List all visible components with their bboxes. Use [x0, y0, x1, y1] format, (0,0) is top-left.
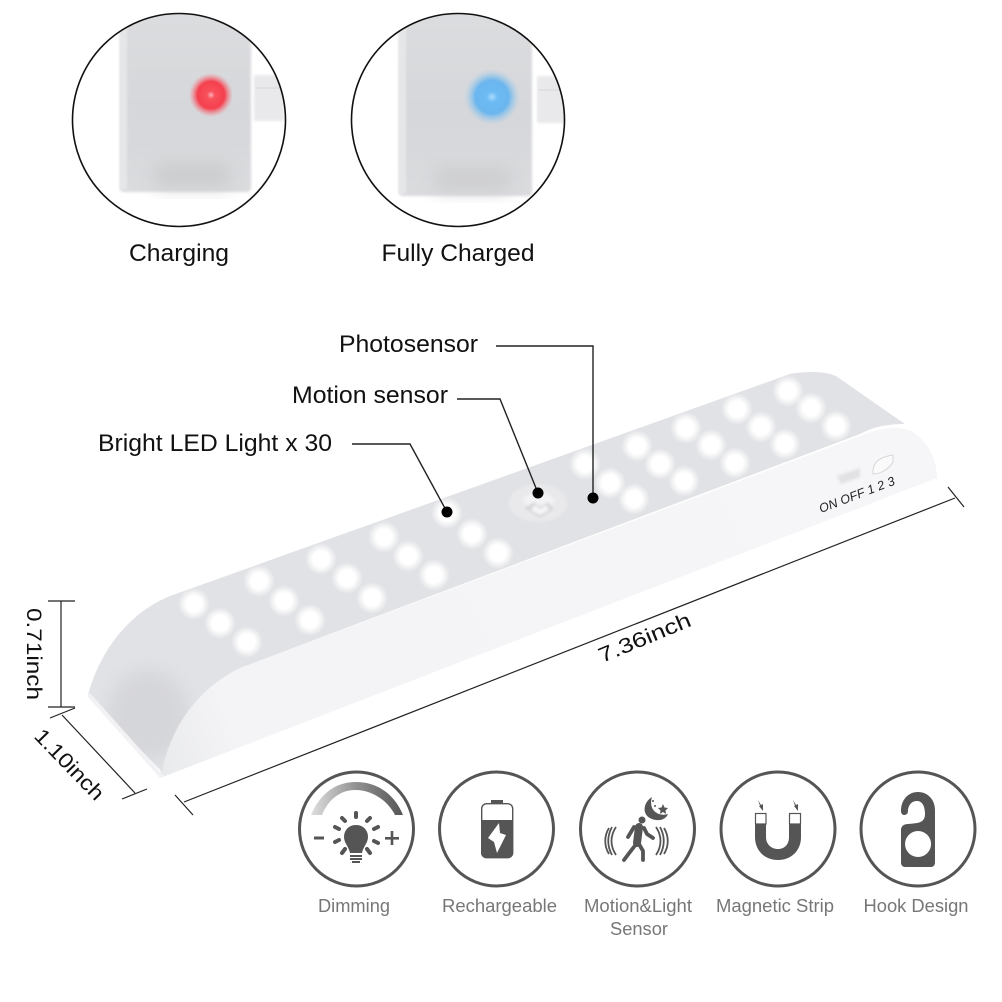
feature: Rechargeable: [440, 772, 557, 916]
icon: light bulb: [314, 813, 399, 863]
dimension: height 0.71inch: [22, 601, 75, 707]
switch labels: ON OFF 1 2 3: [817, 474, 897, 516]
icon: horseshoe magnet: [755, 800, 801, 860]
circle outline: [72, 14, 286, 226]
callout: Photosensor: [339, 331, 598, 504]
label: Rechargeable: Rechargeable: [442, 896, 557, 916]
label: Fully Charged: Fully Charged: [382, 240, 534, 267]
mode button: [873, 455, 893, 474]
icon: sensor waves: [605, 827, 668, 855]
label: Charging: Charging: [129, 240, 229, 267]
feature: Motion & Light Sensor: [580, 772, 694, 939]
end shading: [112, 676, 183, 754]
feature: Motion & Light Sensor: Sensor: [610, 919, 668, 939]
panel: charging indicator: [72, 0, 286, 267]
callout: Bright LED Light x 30: [98, 430, 452, 518]
label: Magnetic Strip: Magnetic Strip: [716, 896, 834, 916]
device close-up: charging: [120, 0, 284, 192]
circle outline: [352, 14, 564, 226]
icon: battery: [481, 800, 513, 858]
dimension: length 7.36inch: 7.36inch: [595, 609, 694, 668]
label: Dimming: Dimming: [318, 896, 390, 916]
callout: Motion sensor: [292, 382, 544, 498]
motion sensor lens: [509, 484, 567, 522]
top surface: [88, 372, 905, 772]
LED array: [178, 375, 852, 658]
panel: fully charged indicator: [352, 0, 569, 267]
icon: moon and star: [645, 797, 668, 820]
feature: Dimming: [300, 772, 414, 916]
icon: blue LED: [464, 69, 520, 125]
label: Hook Design: Hook Design: [864, 896, 968, 916]
label: Motion&Light Sensor: Motion&Light: [584, 896, 692, 916]
icon: door hook hanger: [901, 792, 935, 867]
front face: [160, 428, 937, 778]
dimension: length 7.36inch: [175, 487, 964, 815]
icon: walking person: [624, 816, 653, 860]
device close-up: fully charged: [399, 0, 569, 196]
dimension: height 0.71inch: 0.71inch: [22, 608, 45, 700]
dimension: width 1.10inch: 1.10inch: [29, 724, 108, 805]
base plate: [87, 693, 164, 778]
feature: Magnetic Strip: [716, 772, 835, 916]
switch slider: [837, 468, 860, 484]
feature: Hook Design: [861, 772, 975, 916]
callout: Motion sensor: Motion sensor: [292, 382, 448, 409]
icon: brightness arc: [311, 782, 403, 815]
dimension: width 1.10inch: [29, 708, 147, 805]
callout: Bright LED Light x 30: Bright LED Light x 30: [98, 430, 332, 457]
light bar product: [87, 372, 937, 778]
callout: Photosensor: Photosensor: [339, 331, 478, 358]
icon: red LED: [189, 73, 233, 117]
